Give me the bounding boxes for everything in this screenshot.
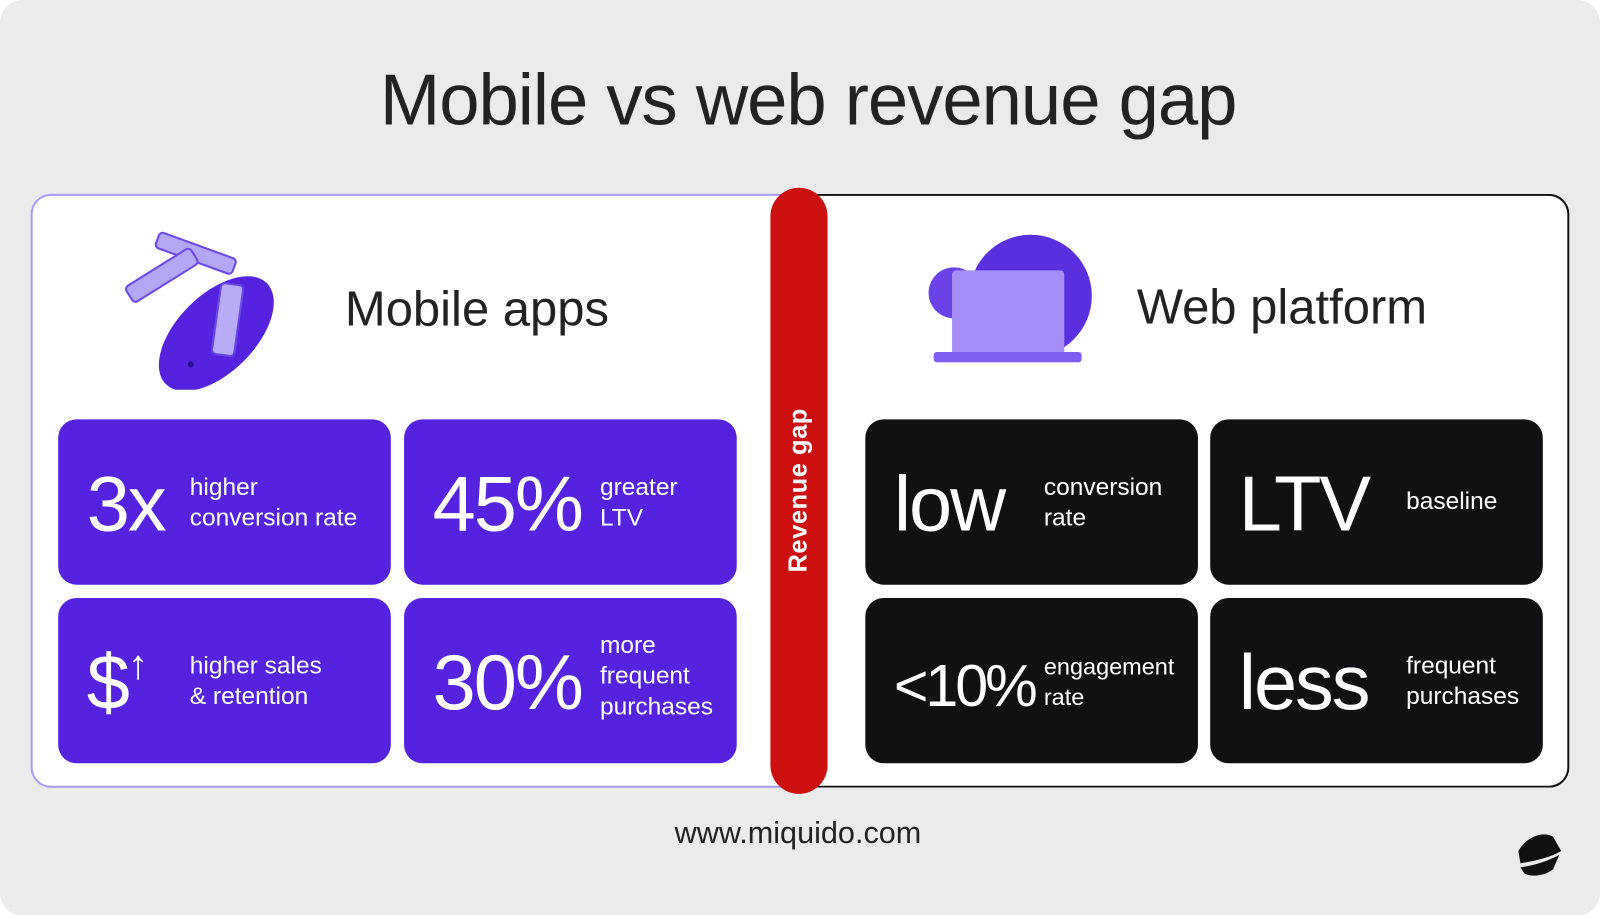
- card: 45%: greater: [600, 473, 678, 501]
- divider: revenue gap pill: [770, 188, 828, 794]
- heading: Mobile apps: Mobile apps: [345, 283, 609, 337]
- card: $: $↑: [87, 640, 146, 727]
- card: $: & retention: [190, 683, 308, 710]
- card: less: [1210, 598, 1543, 763]
- card: 30%: [404, 598, 737, 763]
- heading: Web platform: Web platform: [1137, 281, 1427, 335]
- card: LTV: LTV: [1239, 461, 1369, 548]
- card: low: low: [894, 461, 1004, 548]
- title: Mobile vs web revenue gap: [380, 60, 1236, 141]
- card: low: [865, 419, 1198, 585]
- card: $: [58, 598, 391, 763]
- card: 3x: conversion rate: [190, 504, 357, 532]
- icon: logo: [1518, 834, 1562, 876]
- card: $: higher sales: [190, 652, 322, 680]
- card: 30%: purchases: [600, 693, 713, 720]
- card: 3x: 3x: [87, 461, 165, 548]
- card: <10%: [865, 598, 1198, 763]
- card: low: conversion: [1044, 473, 1162, 501]
- card: LTV: baseline: [1406, 488, 1497, 515]
- card: low: rate: [1044, 504, 1086, 532]
- card: less: less: [1239, 640, 1369, 727]
- card: LTV: [1210, 419, 1543, 585]
- card: 3x: [58, 419, 391, 585]
- card: 3x: higher: [190, 473, 258, 501]
- card: 45%: 45%: [433, 461, 582, 548]
- card: <10%: rate: [1044, 684, 1084, 710]
- label: Revenue gap: Revenue gap: [784, 408, 813, 573]
- icon: laptop: [928, 234, 1092, 362]
- card: 30%: more: [600, 632, 656, 659]
- card: <10%: engagement: [1044, 653, 1174, 680]
- card: 45%: [404, 419, 737, 585]
- panel: web platform: [806, 194, 1569, 788]
- card: 45%: LTV: [600, 504, 643, 532]
- card: 30%: 30%: [433, 640, 582, 727]
- card: 30%: frequent: [600, 662, 690, 690]
- footer url: www.miquido.com: [675, 816, 921, 850]
- card: less: purchases: [1406, 683, 1519, 710]
- panel: mobile apps: [31, 194, 806, 788]
- card: less: frequent: [1406, 652, 1496, 680]
- card: <10%: <10%: [894, 653, 1035, 719]
- icon: mobile phones: [125, 232, 274, 390]
